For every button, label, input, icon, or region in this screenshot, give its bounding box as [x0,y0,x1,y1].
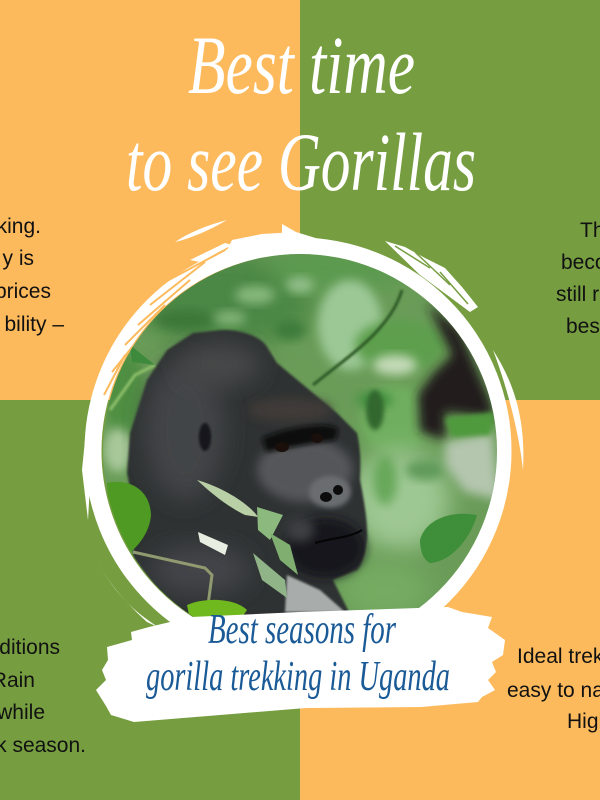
photo background foliage [103,254,497,610]
banner text: Best seasons for [208,605,397,652]
fur highlight [145,360,225,500]
banner: brush stroke [96,607,505,722]
branch [313,290,402,385]
title: Best time [188,20,415,111]
distant gorilla [418,303,494,440]
title [126,20,476,208]
photo: gorilla in foliage [103,254,497,617]
gorilla body [127,330,367,620]
text block: top left season [0,215,64,336]
text block: top right season [556,219,600,338]
text block: top left season: y is [2,247,34,270]
pale rock at right [445,432,500,500]
banner text [146,605,450,699]
text block: top right season: still r [556,283,599,306]
white chest [285,575,345,612]
text block: bottom left season: ditions [0,636,60,659]
text block: top left season: bility – [4,313,64,336]
text block: top right season: bes [566,315,600,338]
brush ring frame [82,220,523,656]
title: to see Gorillas [126,117,476,208]
foreground leaves [107,345,495,620]
gorilla face [199,398,365,578]
banner text: gorilla trekking in Uganda [146,652,450,699]
text block: bottom left season [0,636,86,757]
brush scratches on ring [104,246,468,395]
text block: bottom right season [507,645,600,733]
